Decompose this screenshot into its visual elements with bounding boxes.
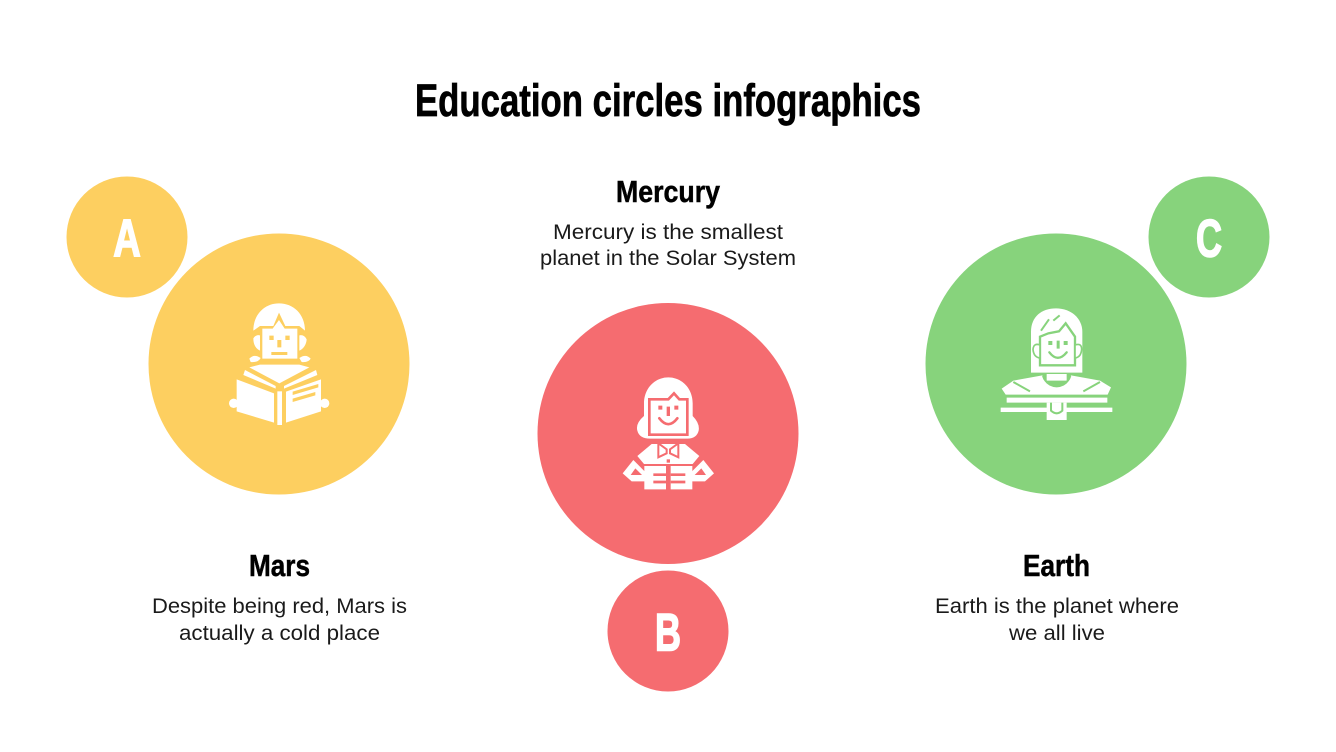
text: Mars description: Despite being red, Mars is	[152, 595, 407, 618]
heading: Mars: Mars	[249, 548, 310, 583]
badge A	[66, 176, 188, 298]
icon: girl holding book	[623, 377, 714, 489]
badge A: A	[113, 208, 141, 268]
text: Mars description	[152, 595, 407, 645]
badge B: B	[655, 603, 681, 662]
title: Education circles infographics	[415, 75, 921, 126]
large yellow circle	[148, 234, 410, 494]
text: Earth description	[935, 595, 1179, 645]
text: Mercury description: Mercury is the smallest	[553, 221, 783, 244]
large green circle	[926, 234, 1186, 494]
icon: person with open book	[1001, 308, 1112, 420]
heading: Mercury: Mercury	[616, 174, 721, 209]
heading: Earth: Earth	[1023, 548, 1090, 583]
badge C	[1148, 176, 1270, 298]
text: Mercury description	[540, 221, 796, 270]
panel: Earth	[926, 176, 1270, 645]
badge B	[608, 570, 728, 692]
panel: Mercury	[538, 174, 798, 692]
text: Mercury description: planet in the Solar System	[540, 247, 796, 270]
icon: person reading book	[229, 303, 329, 425]
badge C: C	[1196, 209, 1222, 268]
text: Earth description: Earth is the planet where	[935, 595, 1179, 618]
panel: Mars	[66, 176, 410, 645]
text: Mars description: actually a cold place	[179, 622, 380, 645]
large red circle	[538, 303, 798, 564]
text: Earth description: we all live	[1008, 622, 1105, 645]
